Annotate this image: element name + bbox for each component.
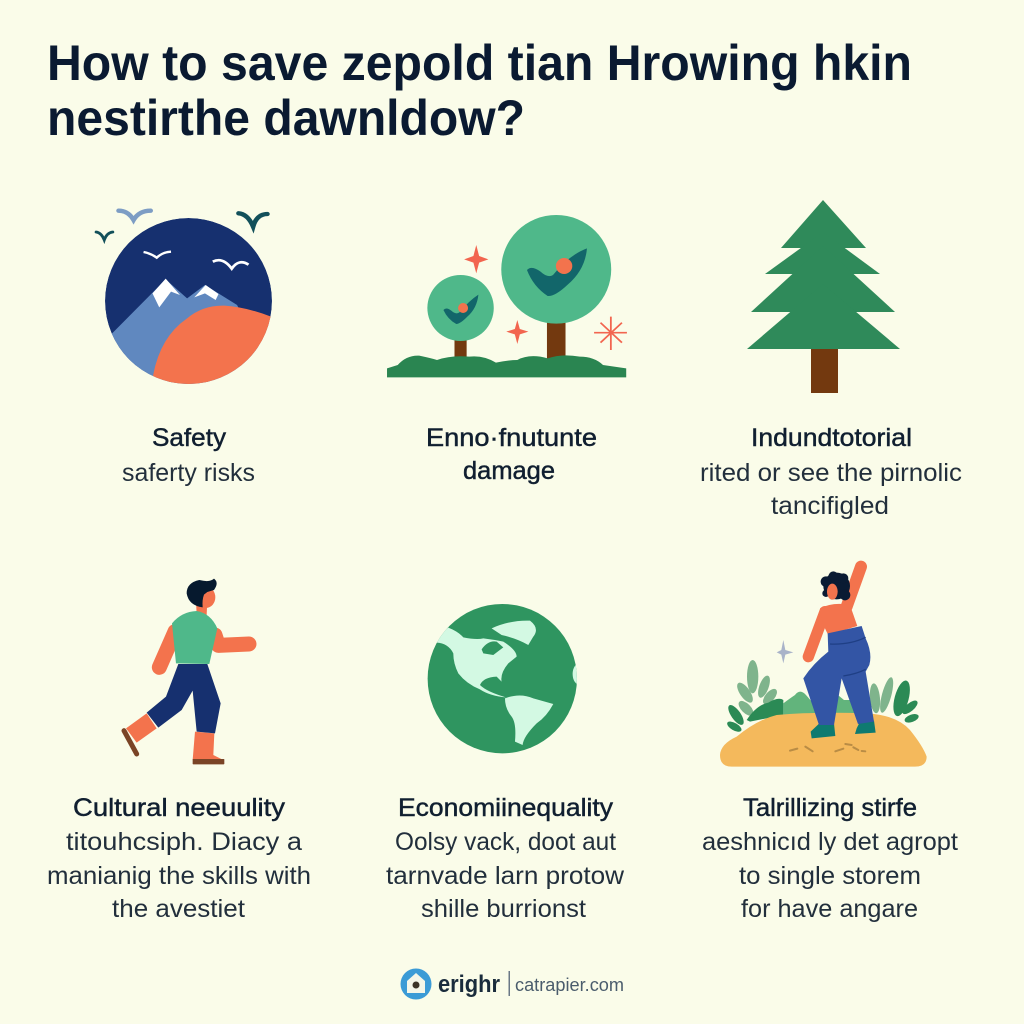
icon: logo badge [400, 968, 432, 1000]
panel: tantalizing [702, 567, 958, 923]
text: brand: erighr [438, 971, 500, 998]
icon: walking person [124, 579, 249, 764]
text: cultural body: manianig the skills with [47, 862, 311, 890]
text: economic body: Oolsy vack, doot aut [395, 828, 616, 856]
heading: tantalizing: Talrillizing stirfe [743, 794, 917, 822]
heading: safety: Safety [152, 424, 227, 452]
text: economic body [386, 828, 625, 923]
panel: safety [94, 211, 280, 487]
icon: mountain landscape circle [94, 208, 272, 384]
icon: dancing woman on mound [720, 567, 927, 767]
title: nestirthe dawnldow? [47, 90, 525, 146]
text: industrial body: rited or see the pirnolic [700, 459, 962, 487]
title [47, 35, 912, 146]
heading: environmental damage: Enno·fnutunte [426, 424, 597, 452]
heading: environmental damage [426, 424, 597, 485]
icon: globe [428, 604, 586, 753]
text: economic body: tarnvade larn protow [386, 862, 625, 890]
panel: industrial [700, 200, 962, 520]
heading: economic inequality: Economiinequality [398, 794, 614, 822]
text: cultural body [47, 828, 311, 923]
text: safety body: saferty risks [122, 459, 255, 487]
heading: cultural: Cultural neeuulity [73, 794, 286, 822]
text: cultural body: the avestiet [112, 895, 245, 923]
text: tantalizing body: aeshnicıd ly det agropt [702, 828, 958, 856]
icon: pine tree [747, 200, 900, 393]
text: economic body: shille burrionst [421, 895, 586, 923]
heading: environmental damage: damage [463, 457, 555, 485]
icon: two round trees on ground [387, 215, 627, 377]
text: url: catrapier.com [515, 975, 624, 995]
text: tantalizing body [702, 828, 958, 923]
panel: economic inequality [386, 604, 625, 923]
title: How to save zepold tian Hrowing hkin [47, 35, 912, 91]
text: industrial body [700, 459, 962, 520]
text: cultural body: titouhcsiph. Diacy a [66, 828, 302, 856]
text: tantalizing body: for have angare [741, 895, 918, 923]
footer: logo and url [400, 968, 624, 1000]
text: industrial body: tancifigled [771, 492, 889, 520]
text: tantalizing body: to single storem [739, 862, 921, 890]
heading: industrial: Indundtotorial [751, 424, 912, 452]
panel: environmental damage [387, 215, 627, 485]
panel: cultural [47, 579, 311, 923]
